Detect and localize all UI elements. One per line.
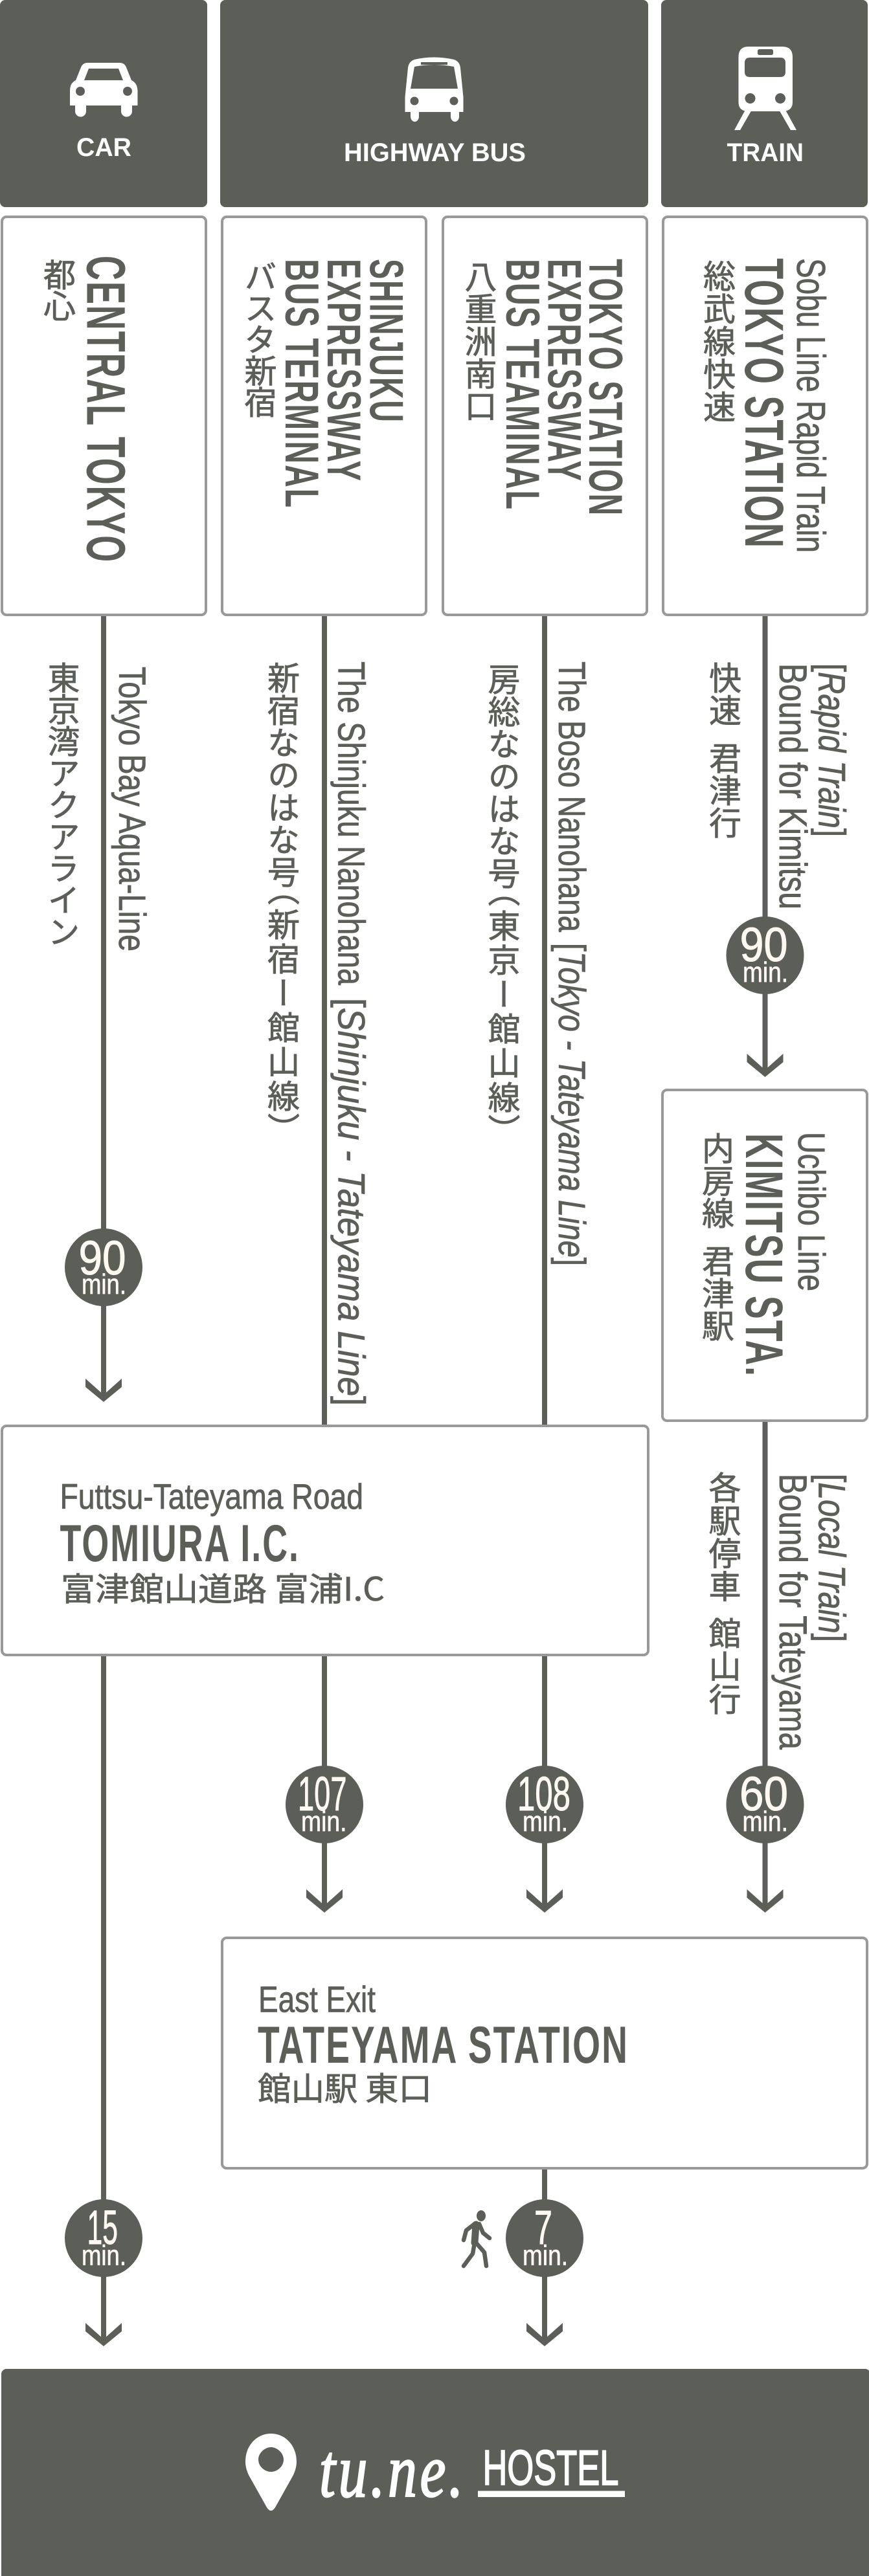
route label: local train: 各駅停車 館山行: [702, 1471, 749, 1716]
icon: location pin: [245, 2434, 297, 2511]
japanese: 富津館山道路 富浦I.C: 富津館山道路 富浦I.C: [61, 1564, 385, 1610]
name: shinjuku expressway bus terminal: SHINJUKU: [360, 259, 412, 423]
badge: 60 min: min.: [742, 1806, 788, 1838]
badge: 90 min train: min.: [743, 957, 788, 988]
name: tokyo station expressway bus teaminal: [496, 259, 631, 516]
name: shinjuku expressway bus terminal: EXPRESSWAY: [317, 259, 370, 482]
panel: central tokyo: [2, 217, 206, 615]
badge: 107 min: 107: [298, 1767, 347, 1821]
panel: kimitsu station: [662, 1090, 867, 1421]
japanese: 内房線 君津駅: 内房線 君津駅: [695, 1132, 741, 1342]
route label: rapid train: [Rapid Train]: [811, 663, 852, 837]
panel: tateyama station: [222, 1938, 867, 2168]
badge: 90 min train: 90: [739, 918, 787, 972]
line name: sobu line: Sobu Line Rapid Train: [788, 258, 833, 553]
route: Tokyo bus line: [526, 615, 563, 1913]
route label: shinjuku nanohana: [260, 661, 372, 1406]
icon: walking person: [464, 2210, 490, 2266]
logo: hostel: [478, 2441, 625, 2497]
badge: 90 min car: min.: [82, 1269, 126, 1300]
badge: 90 min train: [727, 916, 804, 994]
panel: shinjuku terminal: [222, 217, 426, 615]
route label: boso nanohana: [480, 661, 592, 1266]
name: tokyo station expressway bus teaminal: TOKYO STATION: [579, 259, 631, 516]
badge: 90 min car: 90: [79, 1231, 126, 1285]
route label: rapid train: 快速 君津行: [702, 661, 749, 839]
line name: uchibo line: Uchibo Line: [790, 1132, 832, 1291]
route label: boso nanohana: The Boso Nanohana: [550, 661, 592, 933]
panel: tokyo station terminal: [443, 217, 647, 615]
label: car: CAR: [76, 133, 131, 162]
label: train: TRAIN: [727, 139, 804, 167]
route label: shinjuku nanohana: [ Shinjuku - Tateyama Line]: [330, 998, 372, 1406]
badge: 15 min: [65, 2199, 142, 2277]
japanese: バスタ新宿: バスタ新宿: [237, 260, 284, 417]
name: tomiura i.c.: TOMIURA I.C.: [60, 1515, 300, 1573]
japanese: 総武線快速: 総武線快速: [696, 260, 743, 423]
label: highway bus: HIGHWAY BUS: [344, 139, 526, 167]
badge: 15 min: 15: [87, 2201, 118, 2254]
badge: 90 min car: [65, 1228, 142, 1306]
route: Shinjuku bus line: [306, 615, 343, 1913]
badge: 7 min: [506, 2199, 583, 2277]
badge: 107 min: min.: [301, 1806, 347, 1838]
route label: local train: [702, 1471, 852, 1749]
name: tateyama station: TATEYAMA STATION: [258, 2016, 629, 2074]
badge: 108 min: 108: [517, 1767, 570, 1821]
panel: tokyo station sobu line: [663, 217, 867, 615]
badge: 60 min: [727, 1766, 804, 1843]
panel: highway bus header: [220, 0, 648, 207]
logo: hostel: HOSTEL: [483, 2441, 619, 2496]
route label: aqua-line: [40, 661, 153, 951]
route label: rapid train: Bound for Kimitsu: [771, 663, 815, 909]
name: kimitsu sta: KIMITSU STA.: [734, 1133, 793, 1377]
panel: tomiura i.c.: [2, 1426, 648, 1655]
route label: shinjuku nanohana: 新宿なのはな号 （ 新宿ー館山線 ）: [260, 661, 307, 1130]
route label: boso nanohana: [Tokyo - Tateyama Line]: [550, 943, 592, 1266]
route: train line: [747, 615, 784, 1913]
name: tokyo station: TOKYO STATION: [734, 258, 795, 549]
name: tokyo station expressway bus teaminal: BUS TEAMINAL: [496, 259, 548, 511]
icon: car: [70, 63, 137, 117]
badge: 15 min: min.: [82, 2239, 126, 2272]
name: shinjuku expressway bus terminal: [275, 259, 412, 509]
japanese: 八重洲南口: 八重洲南口: [457, 260, 504, 422]
route label: local train: [Local Train]: [811, 1474, 852, 1642]
route: car line: [85, 615, 122, 2346]
name: shinjuku expressway bus terminal: BUS TERMINAL: [275, 259, 328, 509]
japanese: 館山駅 東口: 館山駅 東口: [258, 2063, 432, 2110]
badge: 108 min: min.: [523, 1806, 568, 1838]
badge: 7 min: 7: [534, 2201, 552, 2254]
badge: 60 min: 60: [739, 1767, 788, 1821]
panel: car header: [0, 0, 207, 207]
japanese: 都心: 都心: [36, 258, 83, 321]
road name: Futtsu-Tateyama Road: [60, 1476, 363, 1516]
route label: aqua-line: Tokyo Bay Aqua-Line: [111, 667, 153, 951]
exit name: East Exit: [258, 1979, 376, 2021]
route label: aqua-line: 東京湾アクアライン: [40, 661, 87, 947]
name: tokyo station expressway bus teaminal: EXPRESSWAY: [537, 259, 591, 482]
name: central tokyo: CENTRAL TOKYO: [75, 256, 136, 563]
route label: local train: Bound for Tateyama: [771, 1474, 815, 1749]
badge: 7 min: min.: [523, 2239, 568, 2272]
icon: train: [734, 47, 796, 130]
panel: train header: [661, 0, 868, 207]
route label: shinjuku nanohana: The Shinjuku Nanohana: [330, 661, 372, 986]
route label: rapid train: [702, 661, 852, 909]
badge: 108 min: [506, 1766, 583, 1843]
logo: tu.ne.: tu.ne.: [319, 2428, 466, 2513]
panel: destination: [1, 2369, 869, 2576]
icon: bus: [405, 57, 464, 122]
route: walking line: [526, 2168, 563, 2346]
badge: 107 min: [286, 1766, 363, 1843]
route label: boso nanohana: 房総なのはな号 （ 東京ー館山線 ）: [480, 663, 527, 1131]
